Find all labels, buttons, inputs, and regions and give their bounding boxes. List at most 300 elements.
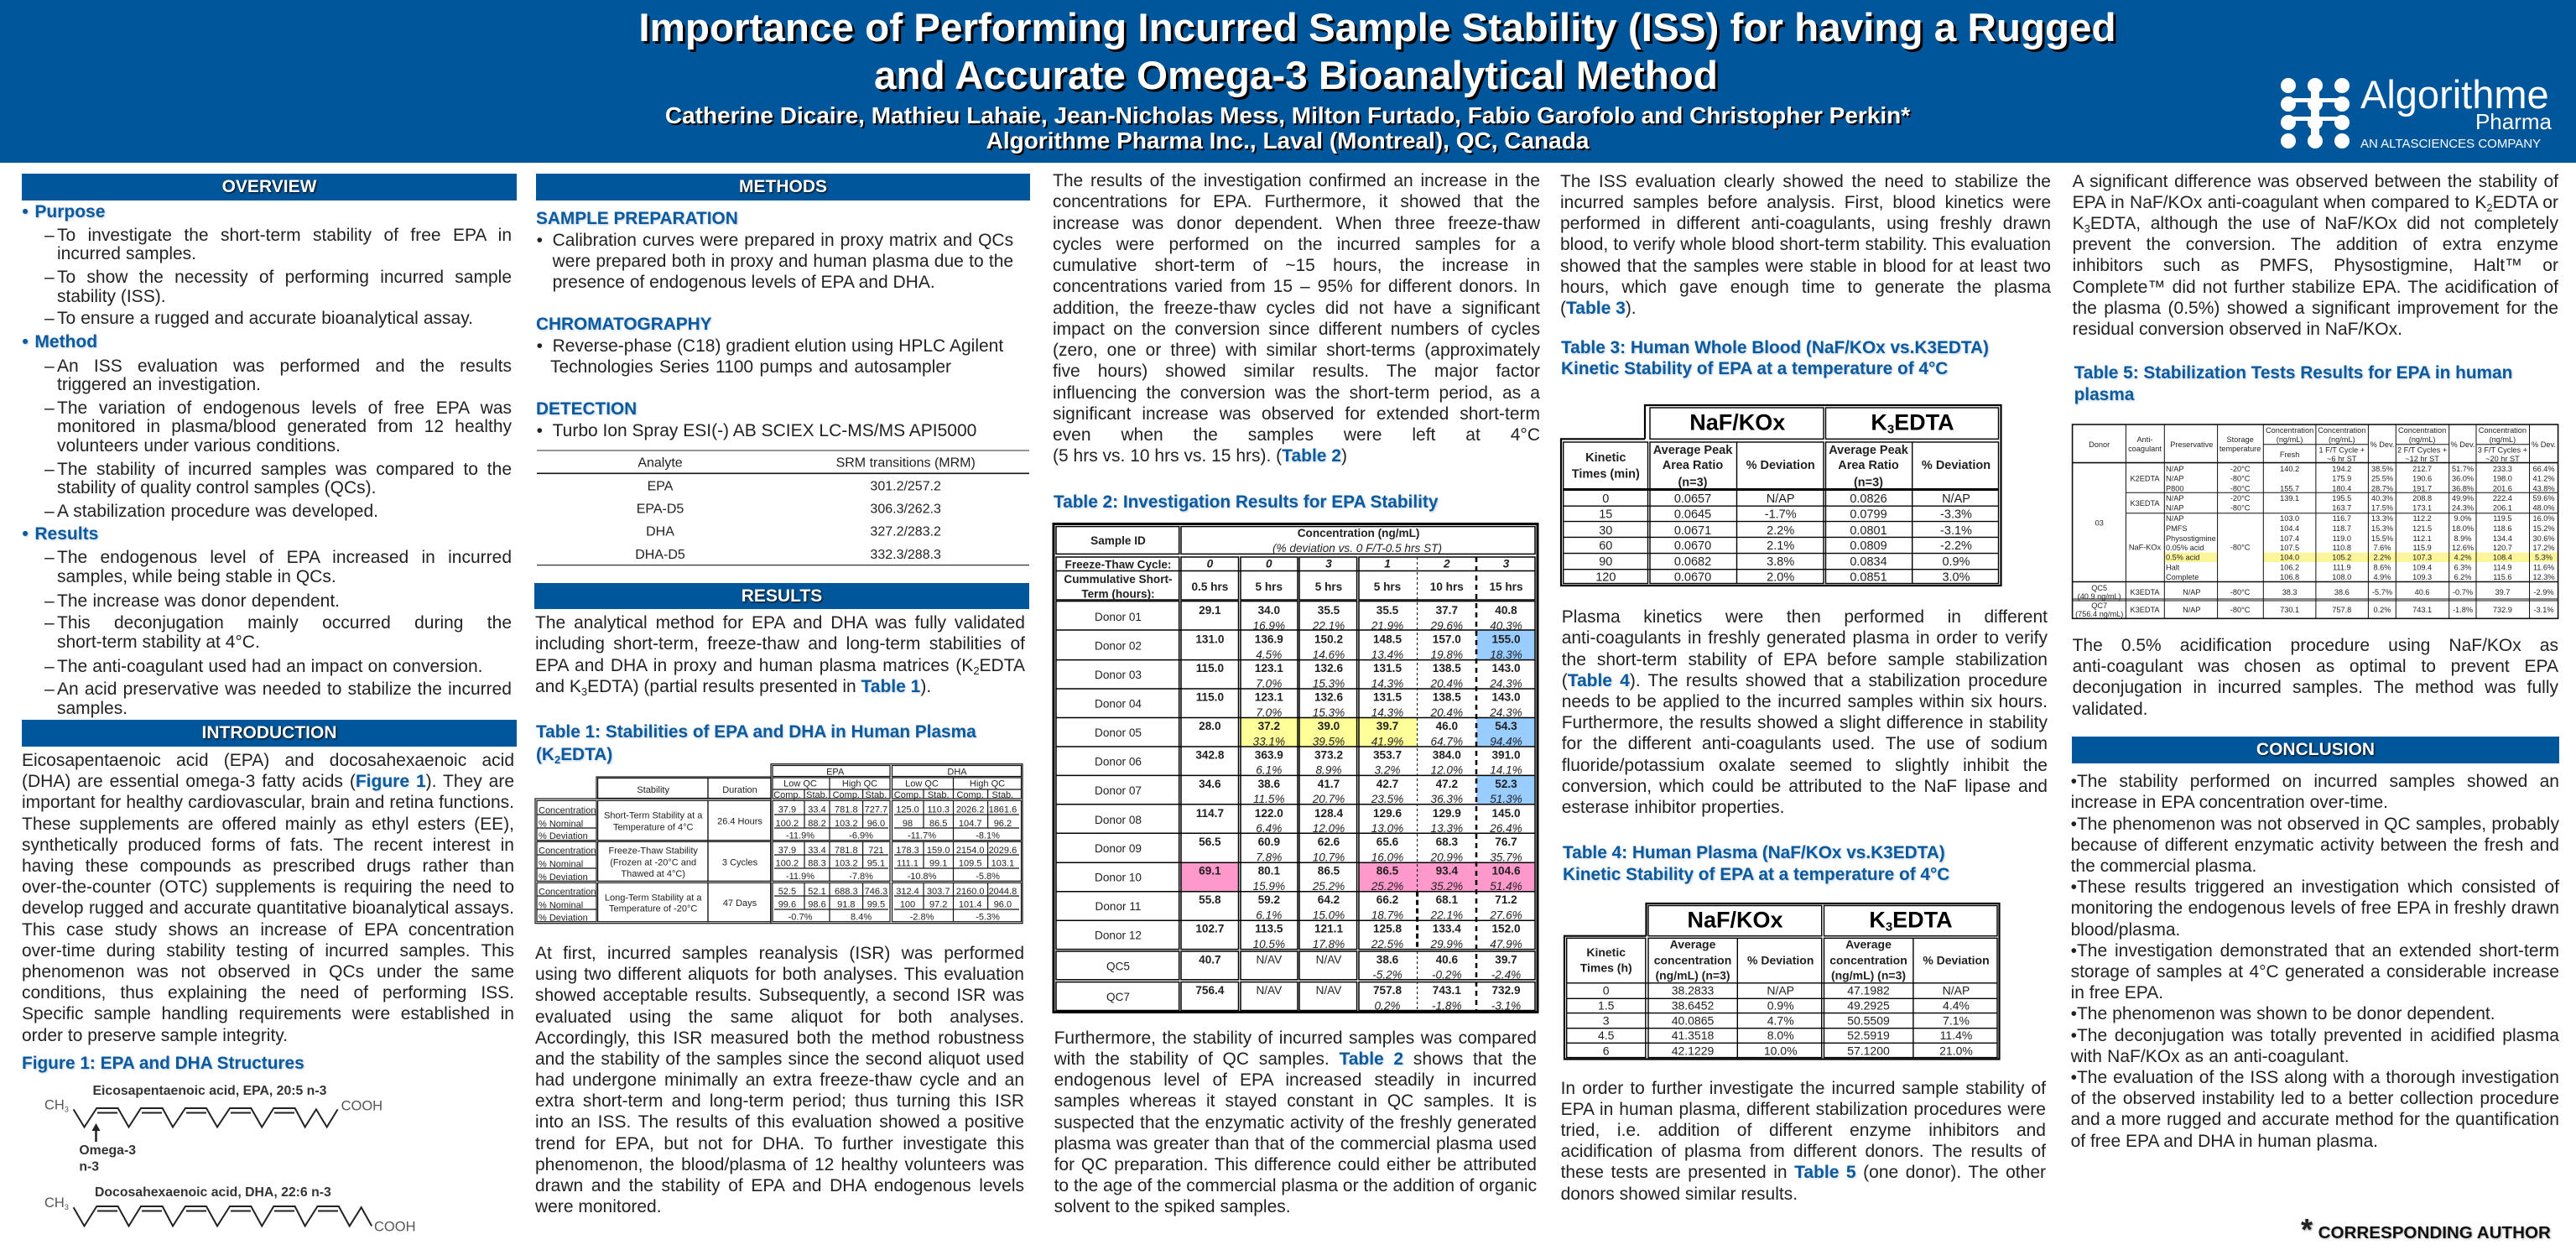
freeze-thaw stability row: 2029.6 — [989, 846, 1017, 856]
table 1 header: High QC — [842, 779, 877, 789]
donor 06: 384.0 — [1433, 748, 1461, 761]
long-term stability row: 746.3 — [865, 887, 887, 897]
text block: method: – — [44, 460, 55, 478]
table 5 data rows: 6.2% — [2454, 573, 2471, 581]
table 2 header: 5 hrs — [1256, 581, 1283, 593]
EPA structure: Eicosapentaenoic acid, EPA, 20:5 n-3 — [92, 1084, 327, 1098]
text block: method: triggered an investigation. — [57, 375, 261, 394]
table: analyte SRM transitions: 327.2/283.2 — [870, 524, 941, 539]
table 5 data rows: 118.6 — [2493, 524, 2512, 533]
donor 08: 26.4% — [1489, 822, 1522, 835]
table 3: whole blood kinetic stability — [1560, 404, 2002, 587]
table 5 data rows: PMFS — [2166, 524, 2188, 533]
table 5 data rows: 6.3% — [2454, 564, 2471, 572]
text block: ISR narrative: trend for EPA, but not for DHA. To further investigate this — [535, 1134, 1024, 1153]
text block: results: Results — [34, 524, 98, 544]
long-term stability row: 99.5 — [867, 900, 885, 910]
text block: anti-coagulant differences: residual conversion observed in NaF/KOx. — [2073, 320, 2402, 339]
table 5 QC rows — [2075, 584, 2554, 618]
donor 12: Donor 12 — [1095, 930, 1142, 941]
panel: conclusion — [2070, 737, 2559, 1151]
text block: QC comparison: plasma was greater than that of the commercial plasma used — [1054, 1134, 1537, 1153]
text block: stabilization procedures: donors showed similar results. — [1561, 1185, 1798, 1204]
table 1 header: Stab. — [992, 790, 1013, 800]
heading: detection: DETECTION — [536, 399, 637, 419]
table 5 data rows: 12.3% — [2532, 573, 2555, 581]
donor 09: 65.6 — [1376, 836, 1399, 848]
QC7: N/AV — [1256, 984, 1282, 997]
table 5 data rows: 201.6 — [2493, 485, 2512, 493]
table 4 header: EDTA — [1892, 907, 1953, 932]
text block: plasma kinetics — [1562, 607, 2048, 817]
text block: results — [22, 524, 512, 718]
table 1 row labels: % Nominal — [539, 900, 583, 910]
table 1 header: Stab. — [928, 790, 950, 800]
text block: introduction body: develop rugged and accurate quantitative bioanalytical assays. — [22, 898, 514, 918]
table 5 data rows: 103.0 — [2280, 514, 2299, 523]
panel: investigation results — [1052, 171, 1540, 1216]
table 5 data rows: 51.7% — [2452, 465, 2474, 473]
donor 01: 16.9% — [1253, 619, 1285, 632]
donor 03: 14.3% — [1371, 677, 1403, 690]
table 5 data rows: -80°C — [2230, 504, 2251, 513]
omega-3 label — [79, 1143, 136, 1174]
freeze-thaw stability row: 3 Cycles — [722, 858, 758, 868]
table 5 header: 3 F/T Cycles + — [2478, 446, 2527, 455]
text block: method: stability of quality control samples (QCs). — [57, 478, 376, 497]
table 5 data rows: 173.1 — [2412, 504, 2432, 513]
table 5 data rows: 18.0% — [2452, 524, 2474, 533]
text block: purpose: To show the necessity of performing incurred sample — [57, 268, 512, 287]
donor 02: 150.2 — [1314, 633, 1343, 646]
donor 12: 22.5% — [1371, 938, 1403, 950]
donor 02: 148.5 — [1373, 633, 1402, 646]
text block: ISS evaluation — [1560, 172, 2052, 318]
text block: results: – — [44, 591, 55, 611]
table 5 data rows: 107.4 — [2280, 534, 2299, 543]
table 5 data rows: 25.5% — [2371, 475, 2393, 483]
title: and Accurate Omega-3 Bioanalytical Method — [874, 54, 1718, 98]
table 4 data: 57.1200 — [1847, 1044, 1890, 1058]
table 2 grid — [1054, 523, 1538, 1012]
donor 05: 54.3 — [1495, 720, 1517, 732]
text block: ISR narrative: phenomenon, the blood/plasma of 12 healthy volunteers was — [535, 1155, 1024, 1174]
table 3 data: N/AP — [1767, 492, 1795, 506]
table 5 data rows: 7.6% — [2374, 544, 2391, 552]
donor 05: 39.0 — [1318, 720, 1340, 732]
text block: ISS evaluation: incurred samples before analysis. First, blood kinetics were — [1560, 193, 2051, 212]
short-term stability row: 104.7 — [959, 819, 981, 829]
text block: optimal procedure — [2072, 636, 2558, 719]
donor 10 — [1095, 865, 1522, 893]
table 3 header: Kinetic — [1585, 451, 1626, 465]
table 1 header: EPA — [826, 767, 845, 777]
donor 03: 15.3% — [1313, 677, 1345, 690]
table 5 data rows: 116.7 — [2333, 514, 2351, 523]
table 5 sample groups: NaF-KOx — [2129, 544, 2162, 552]
table 5 data rows: 115.6 — [2493, 573, 2512, 581]
freeze-thaw stability row: 159.0 — [927, 846, 950, 856]
table 5 data rows: -80°C — [2230, 485, 2251, 493]
text block: investigation findings: significant increase was observed for extended short-term — [1053, 404, 1540, 424]
logo: Algorithme Pharma — [2281, 72, 2553, 151]
table 1 header: Stability — [637, 785, 669, 795]
donor 12: 113.5 — [1255, 923, 1283, 935]
heading: results: RESULTS — [742, 586, 822, 606]
table 4 header: (ng/mL) (n=3) — [1655, 968, 1730, 982]
table 3 data: 0 — [1602, 492, 1609, 506]
donor 10: 35.2% — [1431, 880, 1463, 893]
donor 05 — [1095, 720, 1522, 747]
text block: conclusion bullets: •These results triggered an investigation which consisted of — [2071, 877, 2559, 897]
donor 11: 18.7% — [1371, 909, 1403, 921]
table 5 header: Concentration — [2266, 426, 2313, 435]
text block: conclusion bullets: and a more rugged and accurate method for the quantification — [2071, 1110, 2559, 1129]
table 2 header: Cummulative Short- — [1064, 573, 1173, 586]
donor 05: 46.0 — [1436, 720, 1458, 732]
text block: results: – — [44, 657, 55, 676]
text block: conclusion bullets: in free EPA. — [2071, 983, 2163, 1002]
table 4 data: 10.0% — [1764, 1044, 1798, 1058]
text block: anti-coagulant differences: prevent the conversion. The addition of extra enzyme — [2073, 235, 2558, 254]
donor 05: 39.5% — [1313, 735, 1345, 747]
omega-3 label: n-3 — [79, 1159, 99, 1174]
table 2 header — [1064, 527, 1523, 601]
heading: table 3: Kinetic Stability of EPA at a temperature of 4°C — [1561, 359, 1948, 378]
panel: overview — [22, 174, 517, 718]
text block: anti-coagulant differences: the plasma (0.5%) showed a significant improvement for the — [2073, 299, 2558, 318]
table 1 header: Comp. — [773, 790, 801, 800]
text block: anti-coagulant differences: A significant difference was observed between the stability of — [2073, 172, 2558, 191]
QC7 — [1106, 984, 1521, 1012]
donor 09: 76.7 — [1495, 836, 1517, 848]
table 3 header — [1572, 409, 1991, 490]
title — [638, 6, 2116, 100]
table 3 data: 3.0% — [1942, 571, 1970, 585]
table 5 data rows: 11.6% — [2533, 564, 2554, 572]
QC7: 756.4 — [1195, 984, 1225, 997]
table: analyte SRM transitions: 306.3/262.3 — [870, 502, 941, 517]
table 5 data rows: 118.7 — [2333, 524, 2351, 533]
donor 06: 6.1% — [1256, 764, 1282, 777]
table 2 header: Sample ID — [1090, 534, 1146, 547]
donor 04: 7.0% — [1256, 706, 1282, 719]
table 1 header: Low QC — [905, 779, 939, 789]
freeze-thaw stability row: -5.8% — [976, 872, 1000, 882]
donor 08: 128.4 — [1314, 807, 1343, 820]
table 1 header: Duration — [722, 785, 757, 795]
donor 05: Donor 05 — [1095, 726, 1142, 739]
table 5 data rows: 104.4 — [2280, 524, 2299, 533]
text block: conclusion bullets: •The evaluation of the ISS along with a thorough investigation — [2071, 1068, 2559, 1087]
table 5 data rows: 110.8 — [2333, 544, 2351, 552]
text block: results: The endogenous level of EPA increased in incurred — [57, 548, 512, 567]
QC5: N/AV — [1316, 953, 1341, 966]
donor 06 — [1095, 748, 1522, 777]
freeze-thaw stability row: 2154.0 — [956, 846, 985, 856]
table 1 row labels: Concentration — [539, 887, 596, 897]
table 5 data rows: 119.5 — [2493, 514, 2512, 523]
text block: introduction body: phenomenon was not observed in QCs under the same — [22, 962, 514, 982]
text block: optimal procedure: deconjugation in incurred samples. The method was fully — [2073, 678, 2558, 697]
donor 10: 86.5 — [1376, 865, 1399, 877]
donor 08: 145.0 — [1491, 807, 1521, 820]
table 5 QC rows: K3EDTA — [2130, 588, 2160, 596]
QC5: 39.7 — [1495, 953, 1517, 966]
donor 09: 20.9% — [1430, 851, 1463, 864]
text block: ISS evaluation: (Table 3). — [1560, 299, 1637, 318]
table 4 data: 38.2833 — [1672, 984, 1715, 997]
table 3 data: 30 — [1599, 524, 1612, 538]
DHA structure: COOH — [374, 1220, 416, 1235]
table 5 header: (ng/mL) — [2277, 435, 2303, 444]
text block: method: The variation of endogenous levels of free EPA was — [57, 398, 512, 418]
table 5 data rows: 112.1 — [2412, 534, 2432, 543]
table 5 header: 2 F/T Cycles + — [2397, 446, 2447, 455]
text block: plasma kinetics: conversion, which could be attributed to the NaF lipase and — [1562, 777, 2048, 796]
donor 09: 60.9 — [1258, 836, 1280, 848]
text block: investigation findings: (5 hrs vs. 10 hrs vs. 15 hrs). (Table 2) — [1053, 446, 1347, 466]
panel: methods: • — [537, 231, 543, 250]
donor 12: 133.4 — [1433, 923, 1461, 935]
table 5 data rows: 38.5% — [2371, 465, 2393, 473]
table: analyte SRM transitions: EPA-D5 — [637, 502, 684, 517]
table: analyte SRM transitions: Analyte — [637, 456, 683, 470]
table: analyte SRM transitions: DHA — [646, 524, 674, 539]
table 3 header: Average Peak — [1829, 444, 1909, 457]
table 4 data: 11.4% — [1940, 1028, 1972, 1042]
table 4 data: 4.5 — [1598, 1028, 1615, 1042]
table 3 header: % Deviation — [1746, 459, 1815, 472]
table 5 data rows: 0.05% acid — [2166, 544, 2204, 552]
table 4 data: 41.3518 — [1672, 1028, 1715, 1042]
table 4 header: NaF/KOx — [1687, 907, 1783, 932]
text block: investigation findings: increase was donor dependent. When three freeze-thaw — [1053, 214, 1540, 233]
table 5 header: (ng/mL) — [2409, 435, 2435, 444]
table 3 data — [1595, 492, 1972, 585]
donor 01: 22.1% — [1312, 619, 1345, 632]
long-term stability row: 303.7 — [927, 887, 950, 897]
donor 07: 47.2 — [1436, 778, 1458, 790]
table 3 data: 0.0801 — [1850, 524, 1887, 538]
freeze-thaw stability row: -7.8% — [849, 872, 873, 882]
table 5 data rows: 41.2% — [2532, 475, 2555, 483]
table 5 data rows: 108.4 — [2493, 554, 2512, 562]
table 5 QC rows: 757.8 — [2332, 606, 2351, 614]
freeze-thaw stability row: 103.1 — [991, 859, 1014, 869]
table 2 header: 3 — [1325, 557, 1332, 570]
text block: introduction body: over-the-counter (OTC) supplements is requiring the need to — [22, 877, 514, 897]
table 4 data — [1598, 984, 1973, 1058]
donor 04 — [1095, 690, 1522, 719]
table 4 header: Kinetic — [1586, 945, 1626, 959]
freeze-thaw stability row: 178.3 — [896, 846, 919, 856]
text block: plasma kinetics: anti-coagulants in freshly generated plasma in order to verify — [1562, 628, 2048, 648]
text block: stabilization procedures: EPA in human plasma, different stabilization procedures were — [1561, 1100, 2046, 1119]
donor 11: 15.0% — [1313, 909, 1345, 921]
table 5 QC rows: 39.7 — [2495, 588, 2510, 596]
donor 04: 115.0 — [1196, 690, 1224, 703]
text block: ISS evaluation: The ISS evaluation clearly showed the need to stabilize the — [1560, 172, 2051, 191]
table 3 header: (n=3) — [1854, 476, 1883, 490]
text block: investigation findings: cycles were performed on the incurred samples for a — [1053, 235, 1540, 254]
text block: method: Method — [34, 332, 97, 352]
table 5 sample groups: 03 — [2095, 519, 2104, 528]
donor 12 — [1095, 923, 1522, 950]
text block: ISR narrative: showed acceptable results. Subsequently, a second ISR was — [535, 986, 1024, 1005]
table 1 grid — [535, 764, 1023, 924]
heading: conclusion: CONCLUSION — [2256, 740, 2375, 759]
donor 09: 68.3 — [1436, 836, 1458, 848]
text block: conclusion bullets: •The phenomenon was shown to be donor dependent. — [2071, 1004, 2495, 1023]
table 4 header: % Deviation — [1923, 953, 1990, 966]
table 1 header: Comp. — [833, 790, 860, 800]
text block: results intro — [535, 613, 1025, 698]
text block: method: A stabilization procedure was developed. — [57, 502, 378, 521]
table 4 data: 47.1982 — [1847, 984, 1890, 997]
table 5 data rows: 30.6% — [2532, 534, 2555, 543]
QC5: 38.6 — [1376, 953, 1399, 966]
text block: anti-coagulant differences — [2072, 172, 2558, 339]
text block: sample preparation: presence of endogenous levels of EPA and DHA. — [553, 273, 935, 292]
text block: introduction body: This case study shows an increase of EPA concentration — [22, 920, 514, 940]
text block: ISS evaluation: blood, to verify whole blood short-term stability. This evaluation — [1560, 235, 2051, 254]
donor 04: 131.5 — [1373, 690, 1402, 703]
text block: introduction body: order to preserve sample integrity. — [22, 1026, 288, 1045]
donor 11: 55.8 — [1199, 893, 1221, 906]
donor 01: 40.8 — [1495, 604, 1517, 617]
table 5 data rows: 180.4 — [2332, 485, 2351, 493]
table 5 data rows: 9.0% — [2454, 514, 2471, 523]
freeze-thaw stability row: 109.5 — [959, 859, 981, 869]
donor 10: Donor 10 — [1095, 872, 1142, 884]
donor 06: Donor 06 — [1095, 755, 1142, 768]
text block: results intro: EPA and DHA in proxy and human plasma matrices (K2EDTA — [535, 656, 1025, 677]
donor 06: 14.1% — [1490, 764, 1522, 777]
table 3 header: % Deviation — [1922, 459, 1991, 472]
heading: table 1: Table 1: Stabilities of EPA and DHA in Human Plasma — [536, 722, 976, 742]
table 5 data rows: 108.0 — [2332, 573, 2351, 581]
table 5 header: (ng/mL) — [2490, 435, 2516, 444]
table 3 data: 2.1% — [1767, 539, 1794, 553]
table 5 header: Anti- — [2137, 435, 2152, 444]
donor 05: 28.0 — [1199, 720, 1221, 732]
text block: method: – — [44, 398, 55, 418]
table 5 data rows: N/AP — [2166, 494, 2183, 503]
table 5 QC rows: 743.1 — [2412, 606, 2432, 614]
table 2 header: 3 — [1503, 557, 1510, 570]
freeze-thaw stability row: 103.2 — [835, 859, 858, 869]
heading: table 1: (K2EDTA) — [536, 745, 612, 766]
short-term stability row: -11.9% — [786, 831, 814, 841]
panel: stabilization tests — [2072, 172, 2558, 719]
table 5 QC rows: -5.7% — [2372, 588, 2392, 596]
table 4 header: % Deviation — [1747, 953, 1814, 966]
table 5 QC rows: N/AP — [2183, 606, 2201, 614]
text block: optimal procedure: anti-coagulant was chosen as optimal to prevent EPA — [2073, 657, 2558, 676]
donor 01: 35.5 — [1318, 604, 1340, 617]
table 3 header: Times (min) — [1572, 467, 1640, 481]
table 5 data rows: 115.9 — [2412, 544, 2432, 552]
table 5 data rows: 48.0% — [2532, 504, 2555, 513]
long-term stability row: 52.1 — [808, 887, 826, 897]
text block: investigation findings — [1053, 171, 1540, 466]
donor 12: 152.0 — [1491, 923, 1521, 935]
text block: purpose: – — [44, 268, 55, 287]
authors and affiliation: Algorithme Pharma Inc., Laval (Montreal), QC, Canada — [986, 128, 1589, 154]
long-term stability row: -0.7% — [788, 913, 813, 923]
freeze-thaw stability row: 37.9 — [778, 846, 796, 856]
donor 10: 69.1 — [1199, 865, 1221, 877]
text block: purpose: stability (ISS). — [57, 287, 166, 305]
logo wordmark — [2360, 72, 2553, 151]
long-term stability row: 97.2 — [929, 900, 947, 910]
title: Importance of Performing Incurred Sample Stability (ISS) for having a Rugged — [638, 6, 2116, 50]
donor 07: 23.5% — [1371, 793, 1403, 805]
table 5 data rows: 15.5% — [2371, 534, 2393, 543]
text block: introduction body: Specific sample handling requirements were established in — [22, 1004, 514, 1023]
donor 10: 15.9% — [1253, 880, 1285, 893]
short-term stability row: -6.9% — [849, 831, 873, 841]
table 4 data: 52.5919 — [1847, 1028, 1890, 1042]
table 5 data rows: 120.7 — [2493, 544, 2512, 552]
text block: results: The increase was donor dependent. — [57, 591, 340, 611]
table 5 QC rows: -1.8% — [2453, 606, 2473, 614]
QC7: -3.1% — [1491, 999, 1521, 1012]
donor 06: 12.0% — [1431, 764, 1463, 777]
table 4 data: 1.5 — [1598, 999, 1615, 1013]
table 5 header: % Dev. — [2451, 440, 2475, 449]
table 5 sample groups: K3EDTA — [2130, 499, 2160, 508]
table 5 header: ~20 hr ST — [2485, 455, 2520, 463]
table 4 header: Average — [1670, 937, 1716, 950]
table 5 data rows: 208.8 — [2412, 494, 2432, 503]
arrow: omega-3 position — [92, 1123, 101, 1142]
table 4 data: 0.9% — [1767, 999, 1794, 1013]
table 5 sample groups: -80°C — [2230, 544, 2251, 552]
table 5 data rows: 163.7 — [2332, 504, 2351, 513]
table 2 header: (% deviation vs. 0 F/T-0.5 hrs ST) — [1272, 542, 1442, 555]
donor 07: 11.5% — [1253, 793, 1285, 805]
table 4 data: 50.5509 — [1847, 1013, 1890, 1027]
table 5 data rows: 15.3% — [2371, 524, 2393, 533]
donor 11: Donor 11 — [1095, 900, 1141, 913]
donor 03: 143.0 — [1491, 662, 1521, 674]
logo wordmark: AN ALTASCIENCES COMPANY — [2360, 137, 2541, 151]
text block: results: This deconjugation mainly occurred during the — [57, 613, 512, 633]
donor 07: Donor 07 — [1095, 784, 1142, 797]
authors and affiliation — [665, 102, 1912, 155]
table 3 header: Average Peak — [1653, 444, 1733, 457]
table 4 data: 21.0% — [1939, 1044, 1973, 1058]
text block: QC comparison: suspected that the enzymatic activity of the freshly generated — [1054, 1113, 1537, 1133]
long-term stability row: 2160.0 — [956, 887, 985, 897]
table 5 QC rows: (40.9 ng/mL) — [2078, 592, 2121, 601]
donor 07: 36.3% — [1431, 793, 1463, 805]
table 4 header: concentration — [1829, 953, 1907, 966]
table 5 data rows: 0.5% acid — [2166, 554, 2199, 562]
text block: introduction body: Eicosapentaenoic acid (EPA) and docosahexaenoic acid — [22, 751, 514, 770]
donor 09: Donor 09 — [1095, 842, 1142, 855]
table 5 header: % Dev. — [2532, 440, 2556, 449]
long-term stability row: 312.4 — [896, 887, 919, 897]
text block: ISS evaluation: showed that the samples were stable in blood for at least two — [1560, 257, 2051, 276]
table 1 row labels: % Nominal — [539, 859, 583, 869]
donor 08 — [1095, 807, 1522, 835]
table 3 header: Area Ratio — [1663, 459, 1723, 472]
table 5 data rows: 121.5 — [2412, 524, 2432, 533]
text block: method: • — [22, 332, 29, 352]
